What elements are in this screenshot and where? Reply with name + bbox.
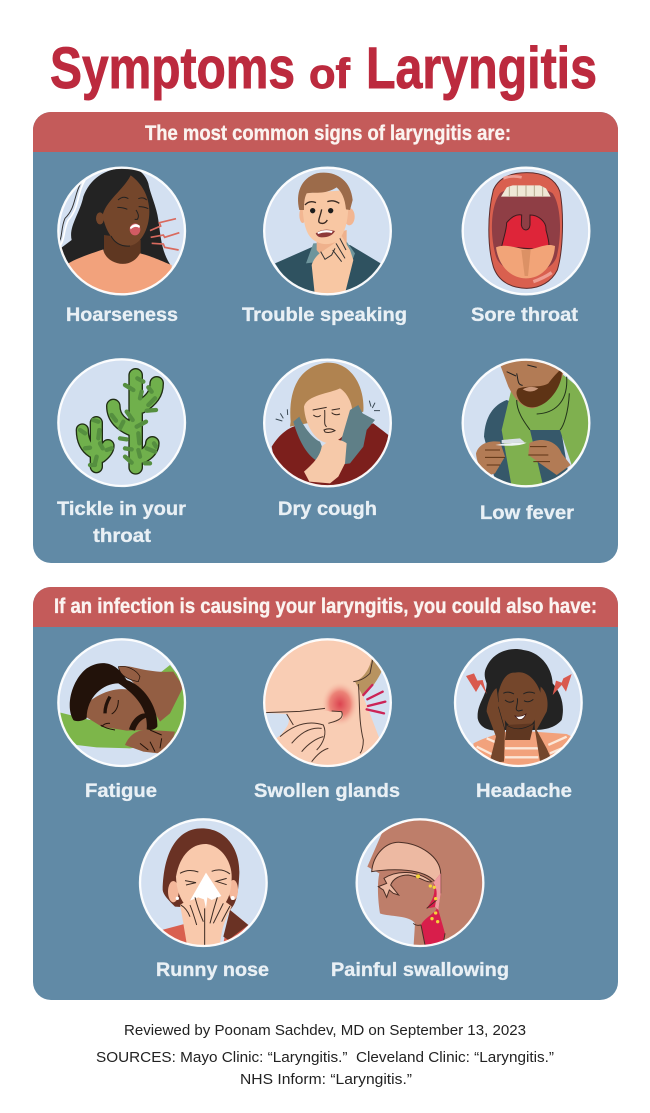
label: runny nose: Runny nose [156, 960, 269, 981]
label: painful swallowing: Painful swallowing [331, 960, 509, 981]
title: Symptoms [50, 36, 295, 101]
label: hoarseness: Hoarseness [66, 305, 178, 326]
label: swollen glands: Swollen glands [254, 781, 400, 802]
title: Laryngitis [366, 36, 597, 101]
icon: low fever [463, 360, 593, 487]
panel header: infection symptoms [33, 587, 618, 627]
label: tickle in your throat: Tickle in your [57, 499, 187, 520]
label: sore throat: Sore throat [471, 305, 579, 326]
label: trouble speaking: Trouble speaking [242, 305, 407, 326]
title: of [309, 50, 351, 97]
label: fatigue: Fatigue [85, 781, 157, 802]
icon: painful swallowing [357, 813, 490, 950]
footer: sources: NHS Inform: “Laryngitis.” [240, 1072, 412, 1088]
label: headache: Headache [476, 781, 572, 802]
footer: review note: Reviewed by Poonam Sachdev, MD on September 13, 2023 [124, 1023, 526, 1039]
panel: most common signs [33, 112, 618, 563]
icon: trouble speaking [264, 168, 391, 297]
icon: hoarseness [58, 168, 185, 297]
label: dry cough: Dry cough [278, 499, 377, 520]
icon: dry cough [264, 360, 391, 490]
icon: fatigue [57, 639, 187, 766]
icon: headache [455, 639, 582, 770]
title [50, 36, 597, 101]
label: low fever: Low fever [480, 503, 575, 524]
panel header: most common signs: The most common signs of laryngitis are: [145, 122, 511, 145]
panel: infection symptoms [33, 587, 618, 1000]
footer: sources: SOURCES: Mayo Clinic: “Laryngitis.” Cleveland Clinic: “Laryngitis.” [96, 1050, 554, 1066]
footer: sources [96, 1050, 554, 1088]
icon: swollen glands [260, 639, 400, 770]
icon: runny nose [140, 819, 267, 953]
icon: cacti [58, 359, 185, 486]
icon: sore throat [463, 168, 589, 294]
panel header: most common signs [33, 112, 618, 152]
label: tickle in your throat [57, 499, 187, 547]
label: tickle in your throat: throat [93, 526, 152, 547]
